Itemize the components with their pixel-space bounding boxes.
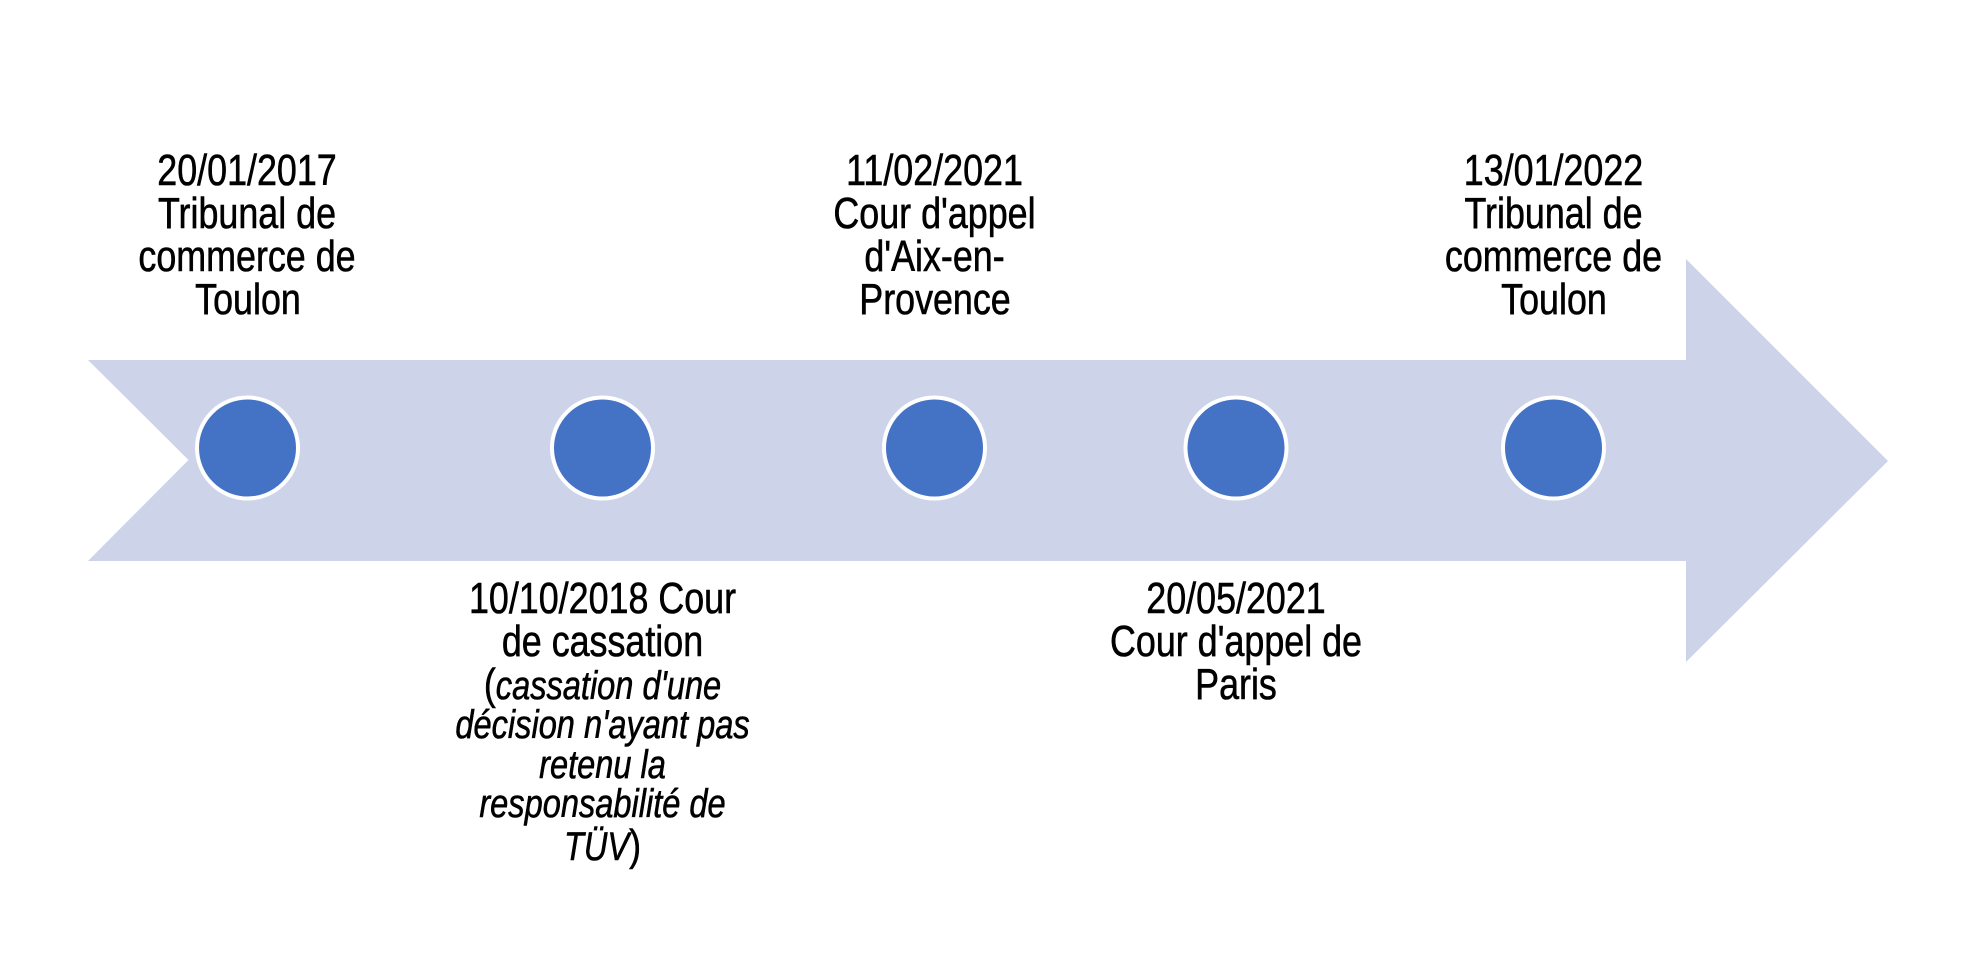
- marker: 13/01/2022: [1503, 398, 1604, 498]
- arrow: timeline band: [88, 259, 1888, 662]
- text: 11/02/2021 Cour d'appel d'Aix-en-Provence: [833, 146, 1036, 324]
- text: 11/02/2021 Cour d'appel d'Aix-en-Provence: Provence: [859, 275, 1011, 324]
- text: 20/01/2017 Tribunal de commerce de Toulon: Toulon: [195, 275, 301, 324]
- text: 10/10/2018 Cour de cassation: TÜV): [564, 821, 641, 870]
- marker: 11/02/2021: [884, 398, 985, 498]
- text: 20/01/2017 Tribunal de commerce de Toulon: commerce de: [138, 232, 356, 281]
- text: 20/05/2021 Cour d'appel de Paris: Cour d'appel de: [1110, 617, 1362, 666]
- text: 11/02/2021 Cour d'appel d'Aix-en-Provence: 11/02/2021: [846, 146, 1023, 195]
- text: 10/10/2018 Cour de cassation: (cassation d'une: [484, 660, 721, 709]
- text: 20/01/2017 Tribunal de commerce de Toulon: 20/01/2017: [157, 146, 337, 195]
- text: 13/01/2022 Tribunal de commerce de Toulon: Tribunal de: [1464, 189, 1643, 238]
- text: 10/10/2018 Cour de cassation: [455, 574, 750, 870]
- text: 13/01/2022 Tribunal de commerce de Toulon: commerce de: [1445, 232, 1662, 281]
- text: 20/05/2021 Cour d'appel de Paris: [1110, 574, 1362, 709]
- marker: 20/01/2017: [197, 398, 298, 498]
- text: 13/01/2022 Tribunal de commerce de Toulon: 13/01/2022: [1464, 146, 1643, 195]
- text: 11/02/2021 Cour d'appel d'Aix-en-Provence: Cour d'appel: [833, 189, 1036, 238]
- marker: 20/05/2021: [1186, 398, 1286, 498]
- text: 20/01/2017 Tribunal de commerce de Toulon: [138, 146, 356, 324]
- text: 10/10/2018 Cour de cassation: retenu la: [539, 742, 666, 787]
- text: 20/05/2021 Cour d'appel de Paris: Paris: [1195, 660, 1277, 709]
- text: 20/05/2021 Cour d'appel de Paris: 20/05/2021: [1146, 574, 1326, 623]
- text: 13/01/2022 Tribunal de commerce de Toulon: [1445, 146, 1662, 324]
- text: 10/10/2018 Cour de cassation: responsabilité de: [479, 781, 726, 826]
- marker: 10/10/2018: [552, 398, 653, 498]
- text: 11/02/2021 Cour d'appel d'Aix-en-Provence: d'Aix-en-: [864, 232, 1005, 281]
- text: 13/01/2022 Tribunal de commerce de Toulon: Toulon: [1501, 275, 1607, 324]
- text: 10/10/2018 Cour de cassation: de cassation: [502, 617, 703, 666]
- text: 10/10/2018 Cour de cassation: décision n'ayant pas: [455, 702, 750, 747]
- text: 10/10/2018 Cour de cassation: 10/10/2018 Cour: [469, 574, 736, 623]
- text: 20/01/2017 Tribunal de commerce de Toulon: Tribunal de: [158, 189, 336, 238]
